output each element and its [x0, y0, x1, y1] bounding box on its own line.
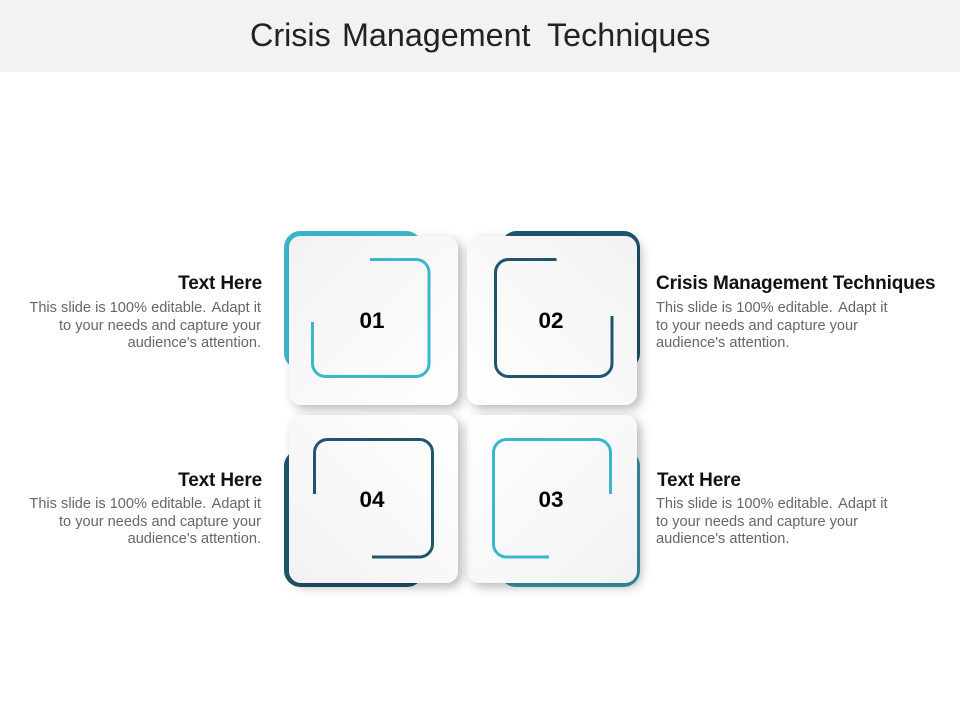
card 01 number: 01 — [359, 308, 385, 333]
text block: top right: Crisis Management Techniques — [656, 273, 935, 294]
panel: card 03 — [467, 415, 638, 584]
card 02 number: 02 — [538, 308, 564, 333]
text block: bottom left: audience's attention. — [128, 531, 261, 547]
text block: top left — [29, 273, 262, 351]
text block: bottom right: to your needs and capture your — [656, 514, 858, 530]
card 04 inner bracket — [314, 440, 432, 557]
card 03 inner bracket — [494, 440, 610, 557]
card 02 face — [467, 236, 637, 405]
text block: bottom left — [29, 470, 262, 547]
text block: top left: This slide is 100% editable. Adapt it — [29, 300, 261, 316]
text block: top right: to your needs and capture your — [656, 318, 858, 334]
card 03 back outline — [502, 452, 638, 584]
text block: bottom right — [656, 470, 888, 547]
card 01 face — [289, 236, 458, 405]
text block: top left: Text Here — [178, 273, 262, 294]
text block: bottom right: This slide is 100% editable. Adapt it — [656, 496, 888, 512]
text block: bottom right: audience's attention. — [656, 531, 789, 547]
text block: bottom left: Text Here — [178, 470, 262, 491]
title: Management — [342, 17, 531, 53]
card 03 number: 03 — [538, 487, 564, 512]
text block: bottom left: This slide is 100% editable. Adapt it — [29, 496, 261, 512]
card 04 number: 04 — [359, 487, 385, 512]
title: Techniques — [547, 17, 710, 53]
text block: top right — [656, 273, 935, 351]
text block: top right: audience's attention. — [656, 335, 789, 351]
card 04 back outline — [286, 452, 421, 584]
panel: card 01 — [286, 234, 458, 405]
card 03 face — [467, 415, 637, 583]
card 01 back outline — [286, 234, 420, 367]
card 02 back outline — [503, 234, 638, 367]
text block: bottom right: Text Here — [657, 470, 741, 491]
title band — [0, 0, 960, 72]
text block: bottom left: to your needs and capture your — [59, 514, 261, 530]
card 02 inner bracket — [496, 260, 612, 376]
text block: top left: audience's attention. — [128, 335, 261, 351]
text block: top right: This slide is 100% editable. Adapt it — [656, 300, 888, 316]
text block: top left: to your needs and capture your — [59, 318, 261, 334]
title: Crisis — [250, 17, 331, 53]
panel: card 04 — [286, 415, 458, 584]
card 01 inner bracket — [312, 260, 429, 376]
panel: card 02 — [467, 234, 638, 405]
card 04 face — [289, 415, 458, 583]
